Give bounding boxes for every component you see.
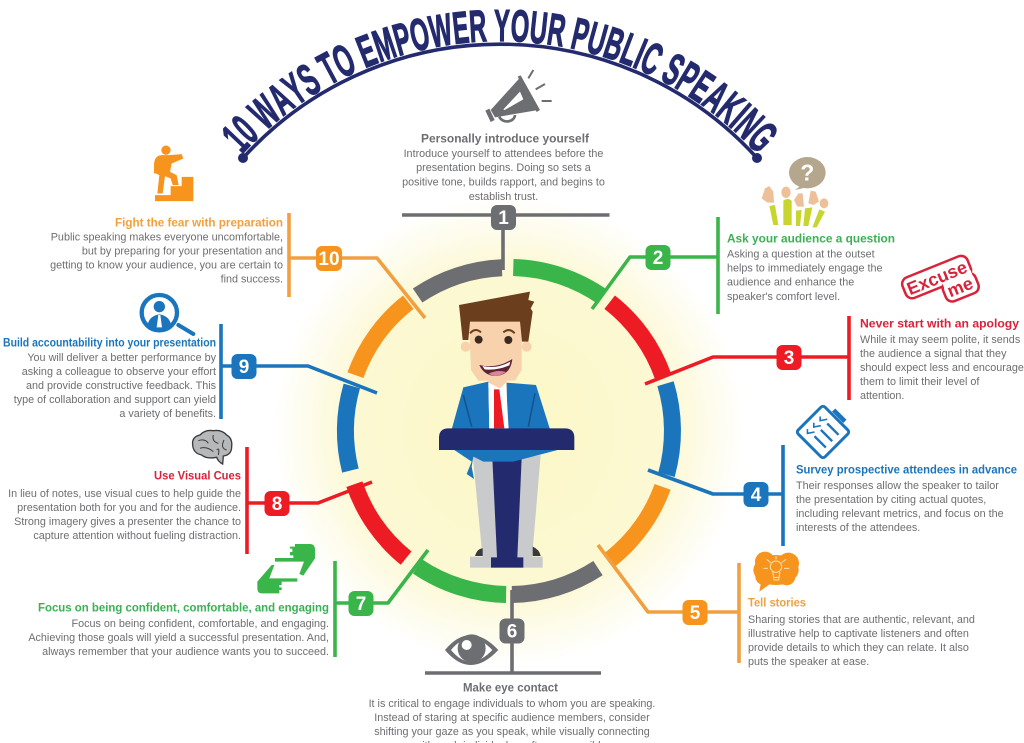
leader 6 bbox=[425, 590, 601, 673]
text 4: interests of the attendees. bbox=[796, 522, 920, 534]
badge 8 bbox=[264, 491, 290, 516]
leader 7 bbox=[335, 550, 428, 657]
leader 2 bbox=[592, 217, 718, 314]
text 10: getting to know your audience, you are certain to bbox=[50, 260, 283, 272]
panel 3: never apologize bbox=[645, 253, 1024, 402]
panel 4: survey attendees bbox=[648, 402, 1017, 546]
badge 10 bbox=[316, 246, 342, 271]
title: O bbox=[324, 34, 363, 88]
heading 10: Fight the fear with preparation bbox=[115, 216, 283, 230]
text 3: the audience a signal that they bbox=[860, 348, 1007, 360]
leader 5 bbox=[598, 545, 739, 663]
title: P bbox=[388, 12, 417, 66]
badge 2: 2 bbox=[653, 248, 663, 269]
title arc bbox=[238, 44, 762, 163]
text 6: Instead of staring at specific audience members, consider bbox=[374, 712, 650, 724]
badge 1: 1 bbox=[498, 208, 509, 229]
heading 2: Ask your audience a question bbox=[727, 232, 895, 246]
text 6: shifting your gaze as you speak, while visually connecting bbox=[374, 726, 650, 738]
text 7: always remember that your audience wants you to succeed. bbox=[42, 646, 329, 658]
badge 5: 5 bbox=[690, 603, 701, 624]
text 1: positive tone, builds rapport, and begins to bbox=[402, 176, 605, 188]
leader 3 bbox=[645, 316, 849, 400]
panel 5: tell stories bbox=[598, 545, 975, 668]
panel 8: visual cues bbox=[8, 430, 372, 554]
title: 0 bbox=[222, 106, 268, 152]
text 9 bbox=[14, 352, 217, 420]
title: T bbox=[310, 43, 347, 94]
text 2: helps to immediately engage the bbox=[727, 262, 882, 274]
heading 8: Use Visual Cues bbox=[154, 468, 241, 482]
text 9: type of collaboration and support can yield bbox=[14, 394, 216, 406]
badge 4: 4 bbox=[751, 485, 762, 506]
panel 2: ask a question bbox=[592, 157, 895, 314]
text 1: presentation begins. Doing so sets a bbox=[416, 162, 591, 174]
icon: light bulb bubble bbox=[753, 552, 799, 592]
panel 1: introduce yourself bbox=[402, 70, 610, 270]
title: G bbox=[738, 113, 788, 161]
text 2: audience and enhance the bbox=[727, 276, 854, 288]
text 7 bbox=[28, 618, 329, 658]
text 5 bbox=[748, 614, 975, 668]
title: Y bbox=[273, 63, 315, 114]
text 1 bbox=[402, 148, 605, 203]
text 6: It is critical to engage individuals to whom you are speaking. bbox=[369, 698, 655, 710]
leader 10 bbox=[289, 213, 425, 318]
badge 9: 9 bbox=[239, 357, 249, 378]
title: M bbox=[367, 17, 402, 72]
title: N bbox=[726, 99, 773, 148]
icon: brain bbox=[193, 430, 232, 464]
icon: magnifier with person bbox=[142, 295, 193, 334]
text 3: attention. bbox=[860, 390, 904, 402]
title: O bbox=[405, 7, 434, 61]
panel 9: accountability bbox=[3, 295, 377, 420]
text 4: Their responses allow the speaker to tailor bbox=[796, 480, 999, 492]
text 9: a variety of benefits. bbox=[119, 408, 216, 420]
text 10: Public speaking makes everyone uncomfortable, bbox=[51, 232, 283, 244]
text 3 bbox=[860, 334, 1024, 402]
text 1: establish trust. bbox=[469, 191, 538, 203]
icon: eye bbox=[445, 634, 498, 665]
text 9: asking a colleague to observe your effort bbox=[22, 366, 216, 378]
title: P bbox=[668, 52, 708, 104]
leader 8 bbox=[247, 447, 372, 554]
icon: raised hands and question bubble bbox=[762, 157, 828, 227]
title bbox=[212, 0, 788, 161]
text 10: find success. bbox=[221, 274, 283, 286]
title: S bbox=[288, 54, 328, 106]
title: U bbox=[582, 12, 612, 66]
title: E bbox=[450, 1, 471, 54]
text 7: Achieving those goals will yield a successful presentation. And, bbox=[28, 632, 329, 644]
title: R bbox=[544, 3, 569, 56]
text 9: You will deliver a better performance by bbox=[27, 352, 217, 364]
panel 10: fight the fear bbox=[50, 145, 425, 318]
text 10 bbox=[50, 232, 283, 286]
heading 7: Focus on being confident, comfortable, and engaging bbox=[38, 600, 329, 614]
heading 1: Personally introduce yourself bbox=[421, 132, 590, 146]
badge 5 bbox=[682, 600, 708, 625]
icon: excuse me stamp: me bbox=[944, 273, 976, 301]
badge 10: 10 bbox=[318, 249, 340, 270]
speaker at podium bbox=[439, 292, 574, 568]
text 8: Strong imagery gives a presenter the chance to bbox=[14, 516, 241, 528]
heading 9: Build accountability into your presentation bbox=[3, 336, 216, 350]
leader 4 bbox=[648, 445, 783, 546]
icon: framing hands bbox=[257, 544, 315, 593]
badge 9 bbox=[232, 354, 256, 379]
title: W bbox=[239, 85, 289, 139]
text 2: Asking a question at the outset bbox=[727, 248, 875, 260]
title: B bbox=[598, 17, 631, 71]
badge 3: 3 bbox=[784, 348, 794, 369]
badge 3 bbox=[776, 345, 802, 370]
text 5: Sharing stories that are authentic, relevant, and bbox=[748, 614, 975, 626]
icon: climbing stairs bbox=[154, 145, 193, 201]
badge 6 bbox=[500, 618, 524, 644]
title: I bbox=[628, 29, 653, 78]
icon: excuse me stamp bbox=[900, 253, 981, 317]
text 3: them to limit their level of bbox=[860, 376, 980, 388]
panel 7: be confident bbox=[28, 544, 428, 658]
title: C bbox=[633, 32, 670, 85]
panel 6: eye contact bbox=[369, 590, 655, 743]
icon: megaphone bbox=[485, 70, 552, 122]
badge 8: 8 bbox=[272, 494, 282, 515]
badge 7: 7 bbox=[356, 594, 366, 615]
text 4: including relevant metrics, and focus on the bbox=[796, 508, 1004, 520]
title: Y bbox=[494, 0, 510, 51]
text 9: and provide constructive feedback. This bbox=[26, 380, 217, 392]
text 5: provide details to which they can relate. It also bbox=[748, 642, 969, 654]
title: L bbox=[614, 23, 646, 76]
text 1: Introduce yourself to attendees before the bbox=[404, 148, 603, 160]
heading 6: Make eye contact bbox=[463, 680, 558, 694]
title: A bbox=[694, 71, 739, 122]
text 8: presentation both for you and for the audience. bbox=[17, 502, 241, 514]
text 4: the presentation by citing actual quotes, bbox=[796, 494, 986, 506]
title: R bbox=[468, 0, 488, 52]
title: O bbox=[509, 0, 531, 52]
title: K bbox=[708, 82, 753, 133]
icon: raised hands and question bubble: ? bbox=[800, 160, 814, 186]
text 2 bbox=[727, 248, 882, 303]
text 7: Focus on being confident, comfortable, and engaging. bbox=[71, 618, 329, 630]
leader 1 bbox=[402, 215, 610, 270]
badge 2 bbox=[646, 245, 670, 270]
icon: clipboard bbox=[796, 402, 853, 459]
title: A bbox=[258, 73, 302, 124]
badge 7 bbox=[348, 591, 374, 616]
title: I bbox=[721, 94, 760, 137]
badge 6: 6 bbox=[507, 622, 517, 642]
text 10: but by preparing for your presentation and bbox=[82, 246, 283, 258]
title: E bbox=[350, 24, 383, 77]
badge 4 bbox=[744, 482, 768, 507]
title: S bbox=[655, 43, 693, 96]
icon: excuse me stamp: Excuse bbox=[904, 257, 970, 299]
heading 5: Tell stories bbox=[748, 596, 806, 610]
title: 1 bbox=[212, 117, 258, 161]
badge 1 bbox=[491, 205, 516, 230]
text 3: While it may seem polite, it sends bbox=[860, 334, 1021, 346]
title: P bbox=[567, 8, 594, 61]
central ring bbox=[345, 268, 672, 594]
title: U bbox=[527, 1, 550, 54]
text 5: illustrative help to captivate listeners and often bbox=[748, 628, 969, 640]
text 2: speaker's comfort level. bbox=[727, 291, 840, 303]
text 4 bbox=[796, 480, 1004, 534]
title: E bbox=[681, 61, 723, 112]
leader 9 bbox=[221, 324, 377, 419]
text 8: capture attention without fueling distraction. bbox=[33, 530, 241, 542]
text 6 bbox=[369, 698, 655, 743]
text 8 bbox=[8, 488, 241, 542]
heading 3: Never start with an apology bbox=[860, 316, 1019, 330]
title: W bbox=[425, 3, 456, 57]
text 8: In lieu of notes, use visual cues to help guide the bbox=[8, 488, 241, 500]
text 5: puts the speaker at ease. bbox=[748, 656, 869, 668]
